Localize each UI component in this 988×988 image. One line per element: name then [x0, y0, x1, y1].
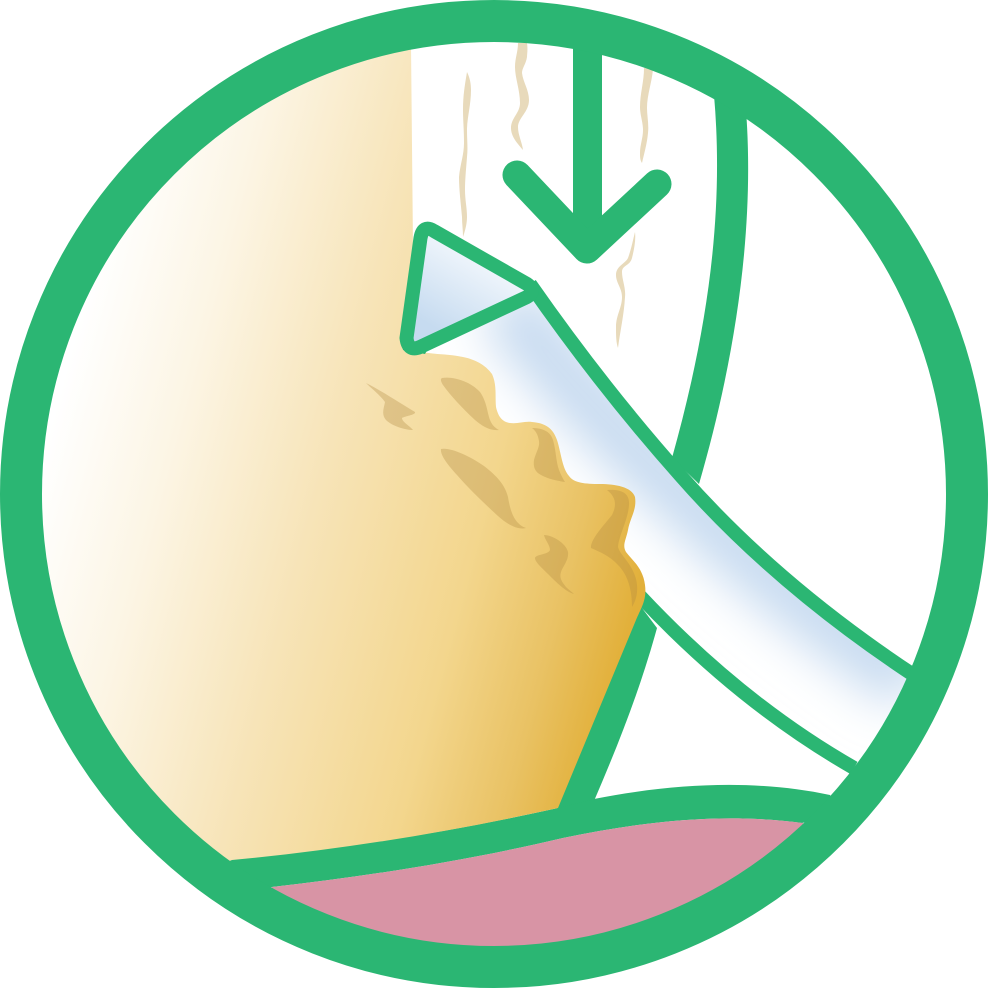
crumb mark large: [441, 449, 526, 528]
pink surface: [265, 818, 812, 955]
down arrow: [517, 40, 657, 250]
crumb mark top: [441, 378, 499, 430]
scraper blade: [469, 280, 912, 774]
back lower green curve: [556, 600, 657, 810]
dough mass: [29, 38, 645, 866]
surface green band: [225, 785, 840, 895]
scraper triangular tip: [401, 229, 532, 354]
back upper green curve: [672, 95, 748, 484]
steam wisps: [459, 43, 653, 348]
crumb mark right edge: [591, 490, 637, 607]
crumb mark centre: [532, 428, 565, 482]
crumb mark lower: [535, 535, 574, 594]
crumb mark left: [366, 383, 415, 430]
